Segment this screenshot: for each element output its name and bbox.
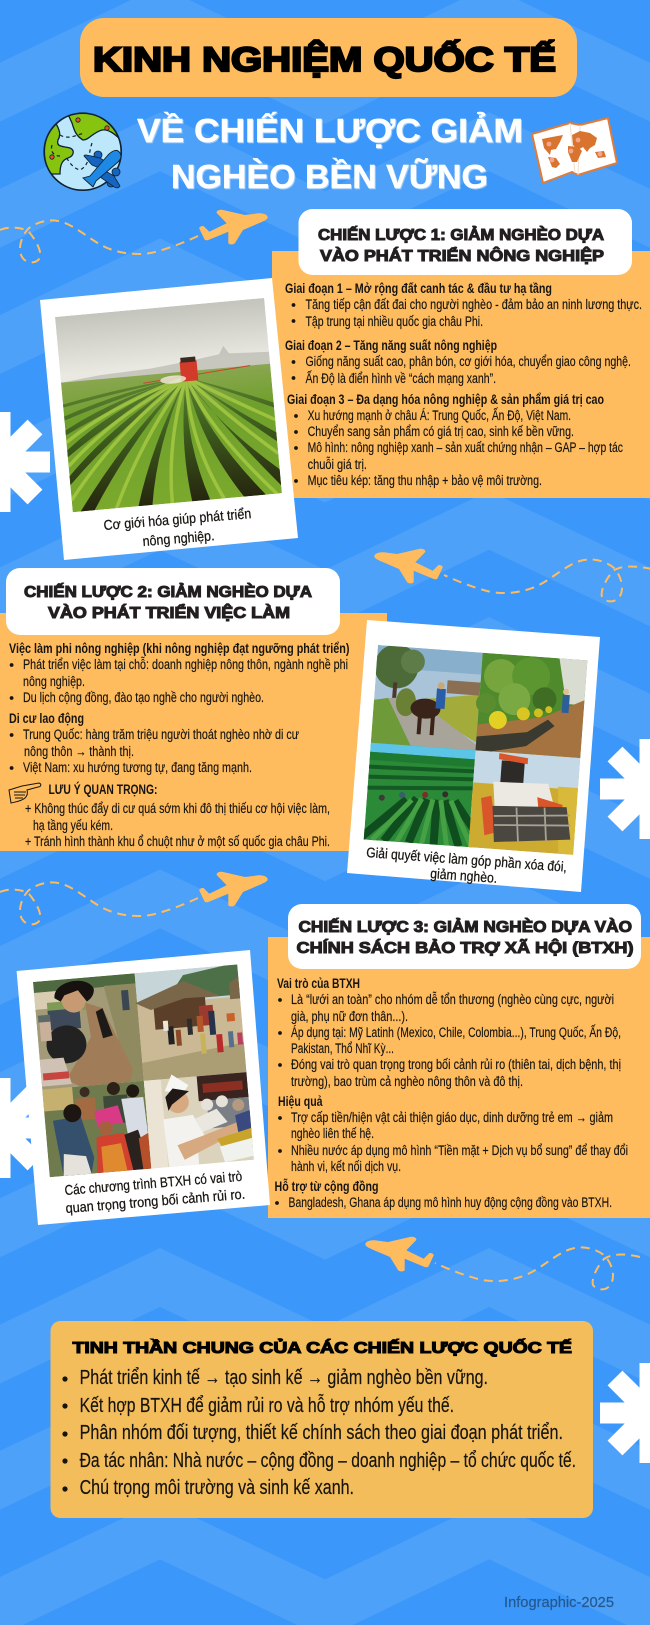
summary list xyxy=(62,1367,576,1499)
strategy 2 text: + Tránh hình thành khu ổ chuột như ở một số quốc gia châu Phi. xyxy=(25,834,330,849)
photo collage: rural work xyxy=(359,643,588,855)
strategy 1 heading: CHIẾN LƯỢC 1: GIẢM NGHÈO DỰA xyxy=(318,227,604,244)
nurse in clinic xyxy=(144,1068,254,1169)
strategy 1 heading xyxy=(298,209,632,275)
summary background xyxy=(50,1321,593,1518)
subtitle: NGHÈO BỀN VỮNG xyxy=(171,158,488,195)
strategy 1 text: chuỗi giá trị. xyxy=(308,457,367,472)
rice harvester xyxy=(468,750,580,855)
summary list: Chú trọng môi trường và sinh kế xanh. xyxy=(80,1477,354,1499)
strategy 3 heading: CHÍNH SÁCH BẢO TRỢ XÃ HỘI (BTXH) xyxy=(296,939,634,957)
strategy 1 text: Xu hướng mạnh ở châu Á: Trung Quốc, Ấn Độ, Việt Nam. xyxy=(308,408,571,423)
icon: white asterisk left, strategy 3 xyxy=(0,1078,50,1178)
photo: tractor in crop field xyxy=(55,298,282,512)
strategy 2 text: Phát triển việc làm tại chỗ: doanh nghiệp nông thôn, ngành nghề phi xyxy=(23,657,348,672)
green fields with workers xyxy=(364,742,476,848)
photo card: jobs collage xyxy=(347,620,600,892)
title: KINH NGHIỆM QUỐC TẾ xyxy=(93,39,556,79)
strategy 1 text xyxy=(285,281,642,488)
strategy 2 text: nông thôn → thành thị. xyxy=(24,744,134,759)
title xyxy=(80,18,577,97)
panel: common spirit summary xyxy=(50,1321,593,1518)
icon: plane and dashed route 1 xyxy=(0,210,268,262)
photo caption: Giải quyết việc làm góp phần xóa đói, xyxy=(366,844,567,875)
icon: white asterisk left, strategy 1 xyxy=(0,412,50,512)
strategy 3 text: hành vi, kết nối dịch vụ. xyxy=(291,1159,401,1174)
strategy 2 text: + Không thúc đẩy di cư quá sớm khi đô thị thiếu cơ hội việc làm, xyxy=(25,801,330,816)
panel: strategy 1 xyxy=(272,209,650,498)
strategy 3 text: Hiệu quả xyxy=(278,1094,323,1109)
stilt hut and children xyxy=(132,962,246,1081)
icon: pointing hand xyxy=(9,783,41,803)
photo card: social protection collage xyxy=(17,950,270,1225)
photo caption: giảm nghèo. xyxy=(430,865,498,886)
strategy 2 background xyxy=(0,613,387,851)
panel: strategy 3 xyxy=(268,904,650,1218)
strategy 1 text: Tập trung tại nhiều quốc gia châu Phi. xyxy=(306,314,483,329)
strategy 3 heading: CHIẾN LƯỢC 3: GIẢM NGHÈO DỰA VÀO xyxy=(298,919,632,936)
strategy 2 text: Du lịch cộng đồng, đào tạo nghề cho người nghèo. xyxy=(23,690,264,705)
strategy 3 text: Vai trò của BTXH xyxy=(277,976,360,991)
footer credit: Infographic-2025 xyxy=(504,1594,614,1611)
strategy 1 text: Chuyển sang sản phẩm có giá trị cao, sinh kế bền vững. xyxy=(308,424,574,439)
strategy 2 text: Di cư lao động xyxy=(9,711,84,726)
icon: plane and dashed route 4 xyxy=(365,1237,640,1289)
strategy 1 text: Mục tiêu kép: tăng thu nhập + bảo vệ môi trường. xyxy=(308,473,542,488)
strategy 1 text: Giai đoạn 2 – Tăng năng suất nông nghiệp xyxy=(285,338,497,353)
melon greenhouse xyxy=(473,652,587,758)
strategy 3 text: già, phụ nữ đơn thân...). xyxy=(291,1009,408,1024)
strategy 3 text: Pakistan, Thổ Nhĩ Kỳ... xyxy=(291,1041,394,1056)
strategy 2 text: Trung Quốc: hàng trăm triệu người thoát nghèo nhờ di cư xyxy=(23,727,299,742)
strategy 2 text: Việc làm phi nông nghiệp (khi nông nghiệp đạt ngưỡng phát triển) xyxy=(9,641,350,656)
strategy 3 background xyxy=(268,937,650,1218)
subtitle: VỀ CHIẾN LƯỢC GIẢM xyxy=(137,112,523,149)
strategy 2 text: LƯU Ý QUAN TRỌNG: xyxy=(48,782,158,797)
strategy 2 heading: CHIẾN LƯỢC 2: GIẢM NGHÈO DỰA xyxy=(24,584,312,601)
strategy 2 text: nông nghiệp. xyxy=(23,674,85,689)
strategy 3 heading xyxy=(288,904,641,969)
photo caption xyxy=(103,505,252,549)
photo caption: Cơ giới hóa giúp phát triển xyxy=(103,505,252,533)
subtitle xyxy=(137,112,523,195)
strategy 1 heading: VÀO PHÁT TRIỂN NÔNG NGHIỆP xyxy=(320,247,604,265)
photo collage: communities xyxy=(33,962,254,1177)
icon: globe with plane xyxy=(43,112,122,191)
icon: plane and dashed route 2 xyxy=(374,549,650,601)
summary heading: TINH THẦN CHUNG CỦA CÁC CHIẾN LƯỢC QUỐC TẾ xyxy=(72,1337,572,1357)
highland crowd xyxy=(42,1079,151,1177)
photo caption xyxy=(64,1168,246,1216)
strategy 1 background xyxy=(272,251,650,498)
photo card: mechanised farming xyxy=(40,278,298,560)
strategy 3 text: trường), bao trùm cả nghèo nông thôn và đô thị. xyxy=(291,1074,523,1089)
icon: world map xyxy=(532,118,617,183)
summary list: Phát triển kinh tế → tạo sinh kế → giảm nghèo bền vững. xyxy=(80,1367,488,1389)
icon: white asterisk right, strategy 2 xyxy=(600,739,650,839)
strategy 1 text: Ấn Độ là điển hình về “cách mạng xanh”. xyxy=(306,371,496,386)
strategy 2 heading xyxy=(6,568,340,635)
strategy 2 heading: VÀO PHÁT TRIỂN VIỆC LÀM xyxy=(48,604,290,622)
woman with aid bag xyxy=(33,973,144,1090)
photo caption: nông nghiệp. xyxy=(142,527,215,549)
strategy 3 text: nghèo liên thế hệ. xyxy=(291,1126,374,1141)
strategy 2 text: Việt Nam: xu hướng tương tự, đang tăng mạnh. xyxy=(23,760,252,775)
ox cart on a rural road xyxy=(369,643,483,750)
strategy 3 text xyxy=(274,976,628,1210)
photo caption: Các chương trình BTXH có vai trò xyxy=(64,1168,243,1198)
strategy 2 text xyxy=(9,641,350,849)
photo caption: quan trọng trong bối cảnh rủi ro. xyxy=(65,1186,246,1216)
panel: strategy 2 xyxy=(0,568,387,851)
icon: plane and dashed route 3 xyxy=(0,872,268,924)
strategy 2 text: hạ tầng yếu kém. xyxy=(33,818,113,833)
summary list: Kết hợp BTXH để giảm rủi ro và hỗ trợ nhóm yếu thế. xyxy=(80,1394,454,1417)
strategy 1 text: Giai đoạn 1 – Mở rộng đất canh tác & đầu tư hạ tầng xyxy=(285,281,552,296)
icon: white asterisk right, summary xyxy=(600,1363,650,1463)
strategy 3 text: Hỗ trợ từ cộng đồng xyxy=(274,1179,378,1194)
